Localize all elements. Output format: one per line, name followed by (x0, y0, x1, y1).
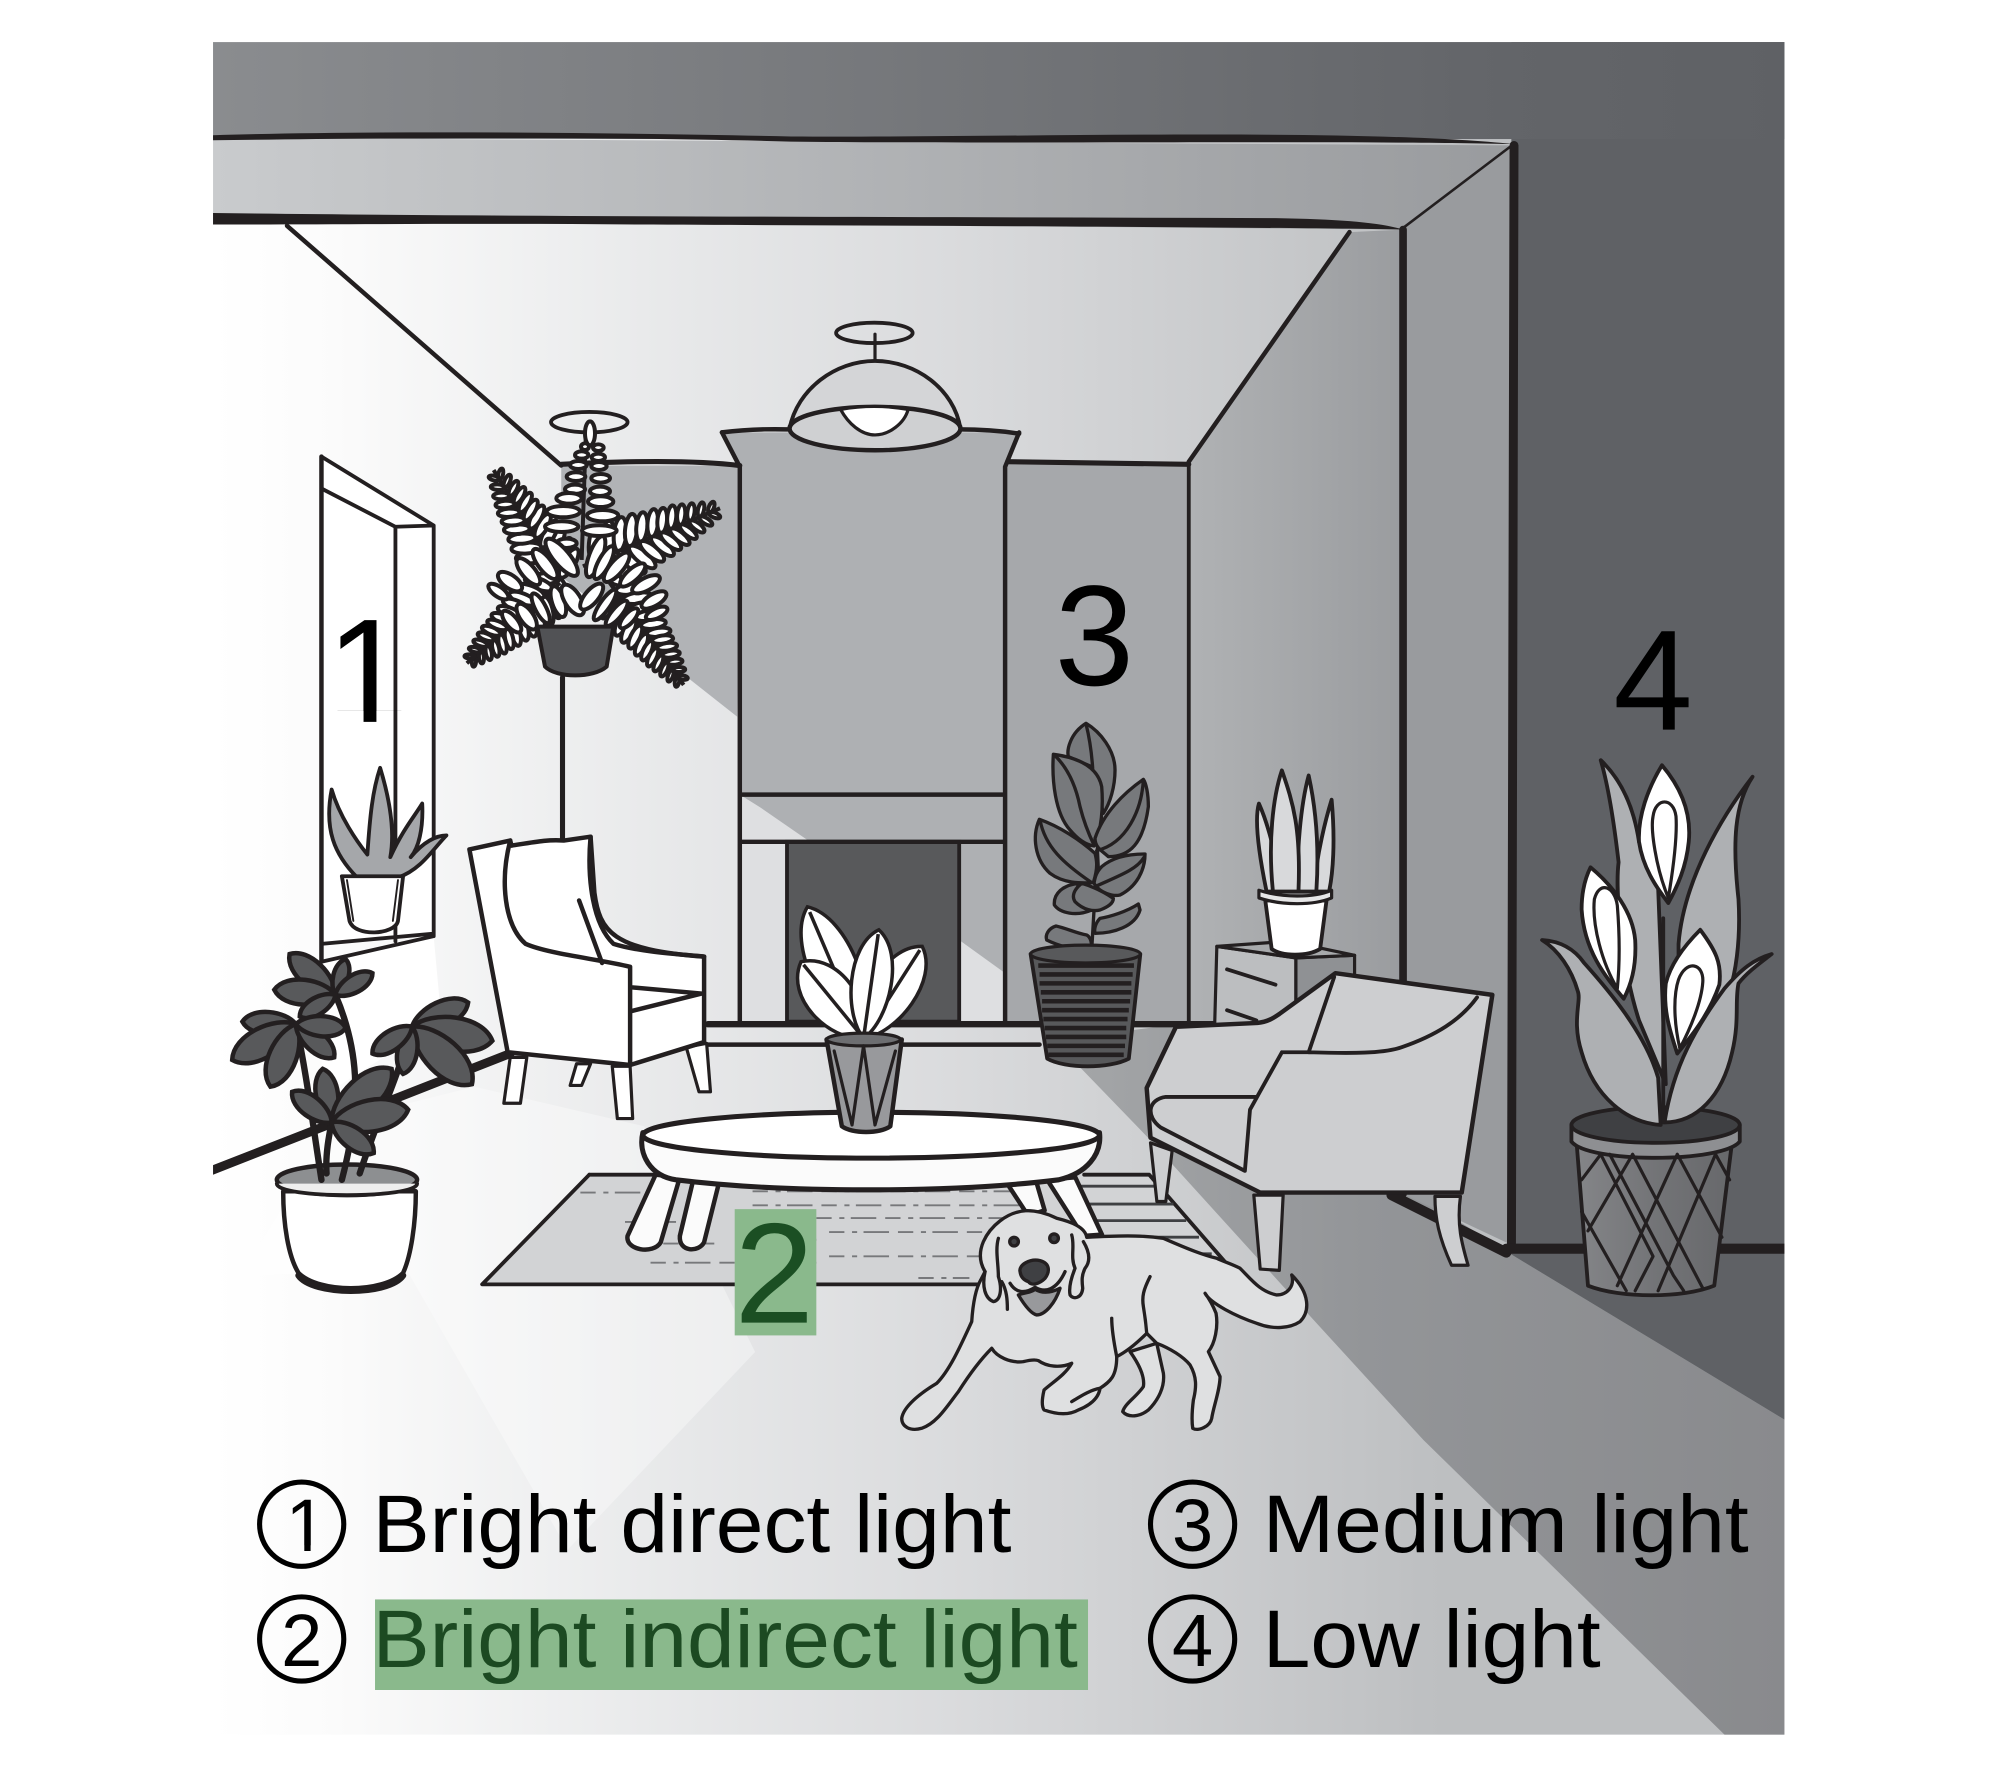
legend item 1: 1 (286, 1484, 327, 1567)
plant: snake plant on dresser (1214, 770, 1355, 1040)
snake plant pot (1265, 900, 1327, 955)
chair legs (504, 1043, 710, 1119)
central leaflets, upper row (541, 534, 583, 580)
number 1: 1 (326, 589, 409, 754)
legend item 2, highlighted: Bright indirect light (372, 1594, 1078, 1685)
highlighted number 2: 2 (735, 1195, 814, 1354)
beam of light on wall below window (321, 936, 441, 1097)
panel: fireplace column (722, 429, 1019, 1023)
lily leaves (1542, 760, 1772, 1125)
plant: ficus in striped pot (1031, 723, 1148, 1066)
lattice pot (1571, 1107, 1740, 1295)
ceiling ring (836, 323, 913, 343)
panel: room scene background (213, 42, 1784, 1735)
panel: top dark band (213, 42, 1784, 139)
lamp shade (790, 361, 960, 429)
panel: back wall, right section (1005, 463, 1189, 1024)
fern outer fronds (448, 453, 734, 702)
room outlines: ceiling, wall corners and baseboards (204, 226, 1792, 1253)
lamp bulb (841, 407, 908, 435)
plant: white-leaf plant on table (782, 898, 941, 1132)
armchair legs (1151, 1143, 1468, 1270)
dog (902, 1211, 1307, 1429)
legend item 3: 3 (1172, 1484, 1213, 1567)
pot (277, 1165, 417, 1291)
dog body and head (902, 1211, 1307, 1429)
dog tongue (1018, 1288, 1060, 1315)
dog ear and fur lines (984, 1235, 1150, 1402)
geometric pot (827, 1033, 902, 1132)
dresser (1214, 941, 1355, 1040)
dog far hind leg (1123, 1343, 1164, 1416)
coffee table (627, 1112, 1102, 1250)
legend item 3: Medium light (1263, 1479, 1749, 1570)
rug (482, 1175, 1247, 1284)
window (321, 457, 434, 962)
number 3: 3 (1055, 557, 1134, 716)
panel: back wall, left section shadow (561, 466, 740, 717)
dog mouth (1010, 1272, 1065, 1292)
panel: dark outer wall and floor (1510, 42, 1784, 1420)
dog eyes (1010, 1237, 1018, 1246)
legend item 4: 4 (1172, 1599, 1213, 1682)
panel: lower gray floor shadow (1059, 1023, 1784, 1735)
snake plant leaves (1257, 770, 1334, 892)
white spathes (1582, 765, 1720, 1054)
striped pot (1031, 945, 1140, 1066)
panel: right pillar (1403, 145, 1514, 1245)
legend item 2, highlighted: 2 (281, 1599, 322, 1682)
fern pot, upper frond and central leaflets (486, 421, 669, 675)
panel: right side wall (1189, 230, 1403, 1193)
plant: large dark-leaf plant in white pot (225, 945, 495, 1291)
pendant lamp (790, 323, 960, 450)
number 4: 4 (1613, 602, 1693, 761)
hanging ring (551, 412, 628, 432)
legend item 4: Low light (1263, 1594, 1601, 1685)
leaves (225, 945, 495, 1162)
plant: peace lily in lattice pot (1542, 760, 1772, 1295)
plant: succulent in window (329, 768, 446, 932)
legend (260, 1479, 1749, 1690)
central leaflets, lower row (513, 601, 541, 633)
stems (296, 995, 412, 1180)
armchair: gray armchair (1147, 973, 1492, 1270)
armchair: white wing chair (469, 837, 710, 1119)
dog nose (1020, 1260, 1048, 1284)
table legs (627, 1175, 680, 1250)
beam of direct light on floor (242, 1087, 755, 1550)
tabletop (642, 1133, 1100, 1190)
legend item 1: Bright direct light (372, 1479, 1012, 1570)
plant: hanging fern (448, 412, 734, 702)
panel: ceiling trim (213, 132, 1514, 230)
ficus leaves (1035, 723, 1148, 951)
